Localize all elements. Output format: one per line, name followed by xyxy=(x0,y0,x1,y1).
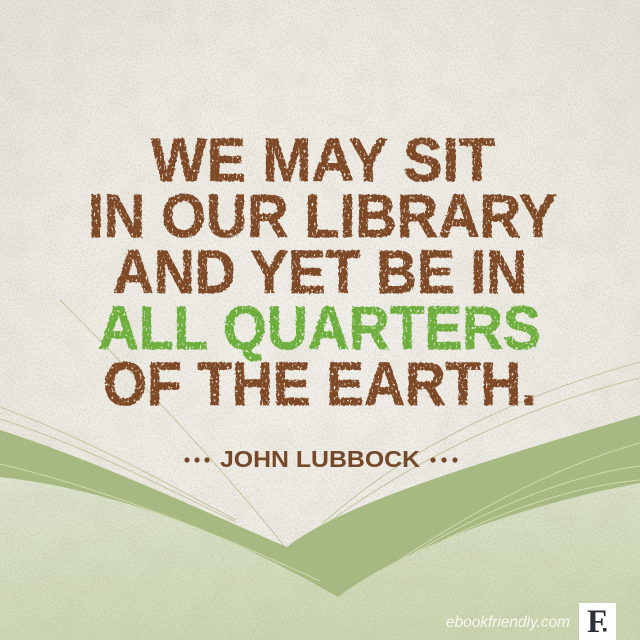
quote line 4 highlighted: ALL QUARTERS xyxy=(98,294,541,362)
left dots xyxy=(184,457,210,463)
quote line 3: AND YET BE IN xyxy=(113,238,527,306)
quote line 2: IN OUR LIBRARY xyxy=(88,182,557,250)
logo: F xyxy=(587,604,607,640)
attribution xyxy=(184,446,458,472)
green book band xyxy=(0,415,640,640)
thin page lines on paper xyxy=(0,300,640,547)
open book illustration xyxy=(0,300,640,640)
website label: ebookfriendly.com xyxy=(446,614,570,631)
quote xyxy=(88,126,557,418)
pale lines in the band xyxy=(0,443,640,581)
pale book pages xyxy=(0,477,640,640)
logo xyxy=(579,603,616,640)
quote line 1: WE MAY SIT xyxy=(151,126,495,194)
right dots xyxy=(430,457,458,463)
author name: JOHN LUBBOCK xyxy=(220,446,420,472)
quote line 5: OF THE EARTH. xyxy=(103,350,537,418)
